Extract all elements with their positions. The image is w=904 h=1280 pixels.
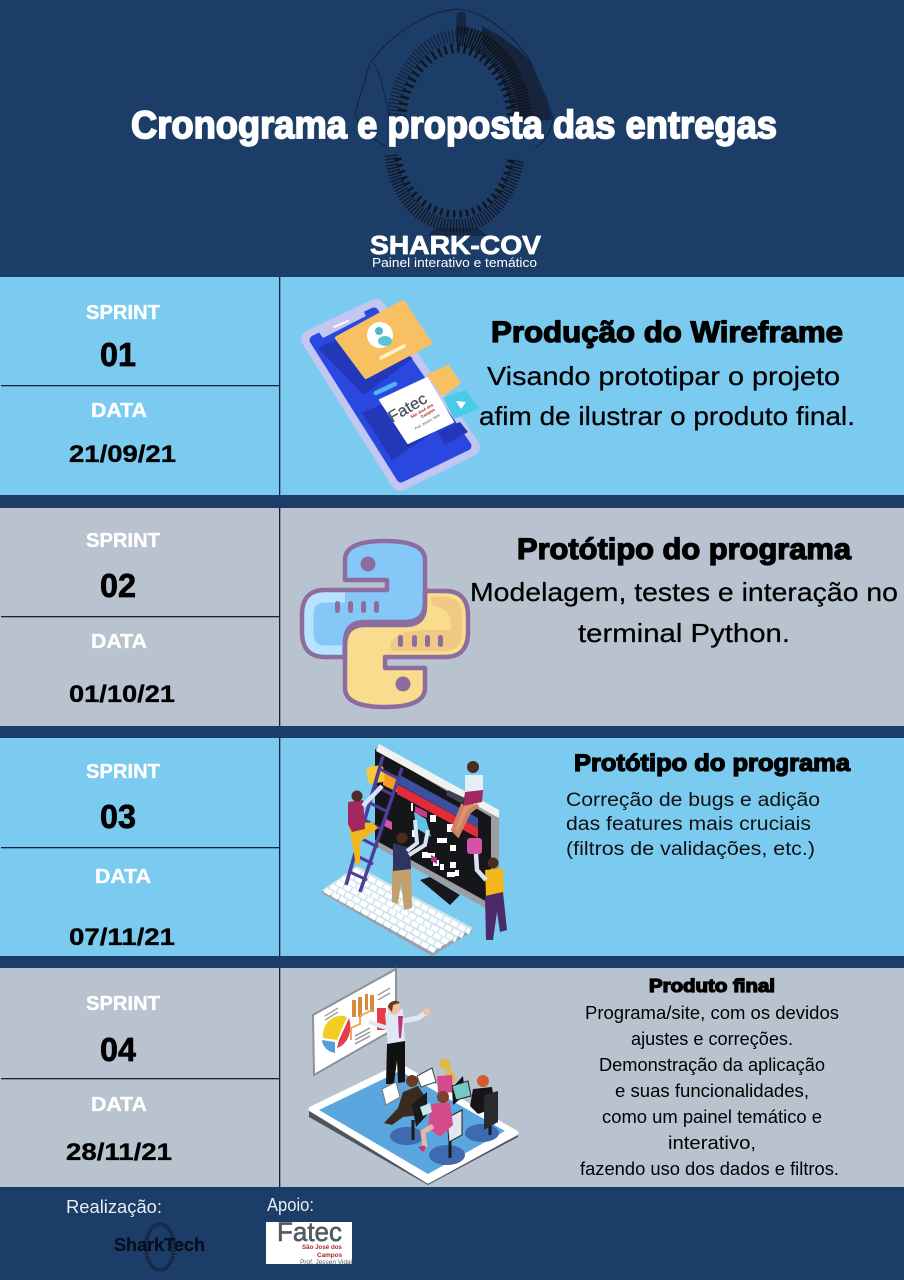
- label: Realização:: [66, 1197, 162, 1217]
- description: como um painel temático e: [602, 1107, 822, 1127]
- heading: Protótipo do programa: [517, 533, 851, 566]
- icon: developers building a screen: [322, 744, 507, 956]
- sprint number: 04: [100, 1031, 137, 1068]
- description: [479, 361, 855, 431]
- sprint label: SPRINT: [86, 761, 160, 783]
- sprint label: SPRINT: [86, 530, 160, 552]
- description: ajustes e correções.: [631, 1029, 793, 1049]
- icon: smartphone wireframe: São José dos: [409, 402, 435, 419]
- date: 21/09/21: [69, 441, 176, 468]
- label: Apoio:: [267, 1195, 314, 1215]
- sprint label: SPRINT: [86, 993, 160, 1015]
- description: Demonstração da aplicação: [599, 1055, 825, 1075]
- logo: Fatec: Fatec: [277, 1217, 342, 1247]
- date label: DATA: [91, 400, 147, 422]
- description: interativo,: [668, 1133, 756, 1153]
- sprint number: 02: [100, 567, 136, 604]
- description: (filtros de validações, etc.): [566, 839, 815, 860]
- icon: smartphone wireframe: [310, 302, 477, 482]
- date: 28/11/21: [66, 1139, 172, 1166]
- date: 01/10/21: [69, 681, 175, 708]
- panel: sprint 02: [0, 508, 904, 726]
- description: afim de ilustrar o produto final.: [479, 401, 855, 431]
- heading: Protótipo do programa: [574, 750, 851, 777]
- description: Correção de bugs e adição: [566, 790, 820, 811]
- icon: presentation to a team: [309, 969, 518, 1185]
- icon: smartphone wireframe: Fatec: [385, 390, 430, 426]
- sprint label: SPRINT: [86, 302, 160, 324]
- icon: smartphone wireframe: Campos: [420, 407, 437, 419]
- logo: Fatec: Prof. Jessen Vidal: [300, 1260, 352, 1266]
- heading: Produto final: [649, 976, 775, 996]
- description: Modelagem, testes e interação no: [470, 577, 898, 607]
- footer: apoio: [266, 1195, 352, 1266]
- footer: realização: [66, 1197, 205, 1270]
- date label: DATA: [91, 1094, 147, 1116]
- heading: Produção do Wireframe: [491, 316, 843, 349]
- logo: Fatec: Campos: [317, 1252, 342, 1259]
- sprint number: 03: [100, 798, 136, 835]
- date label: DATA: [91, 631, 147, 653]
- description: [470, 577, 898, 648]
- title: Cronograma e proposta das entregas: [131, 104, 777, 147]
- logo: SharkTech: SharkTech: [114, 1235, 205, 1255]
- panel: sprint 03: [0, 738, 904, 956]
- description: e suas funcionalidades,: [615, 1081, 809, 1101]
- icon: shark jaw background: [355, 9, 553, 236]
- description: Visando prototipar o projeto: [487, 361, 840, 391]
- description: Programa/site, com os devidos: [585, 1003, 839, 1023]
- panel: sprint 01: [0, 277, 904, 495]
- icon: python logo: [302, 541, 468, 707]
- description: [580, 1003, 839, 1179]
- description: [566, 790, 820, 860]
- date: 07/11/21: [69, 924, 175, 951]
- panel: sprint 04: [0, 968, 904, 1187]
- sprint number: 01: [100, 336, 136, 373]
- description: fazendo uso dos dados e filtros.: [580, 1159, 839, 1179]
- logo: Fatec: [266, 1217, 352, 1266]
- description: terminal Python.: [578, 618, 790, 648]
- date label: DATA: [95, 866, 151, 888]
- description: das features mais cruciais: [566, 814, 811, 835]
- logo: Fatec: São José dos: [302, 1244, 342, 1251]
- project name: SHARK-COV: [370, 230, 542, 260]
- subtitle: Painel interativo e temático: [372, 255, 537, 270]
- icon: smartphone wireframe: Prof. Jessen Vidal: [414, 413, 441, 431]
